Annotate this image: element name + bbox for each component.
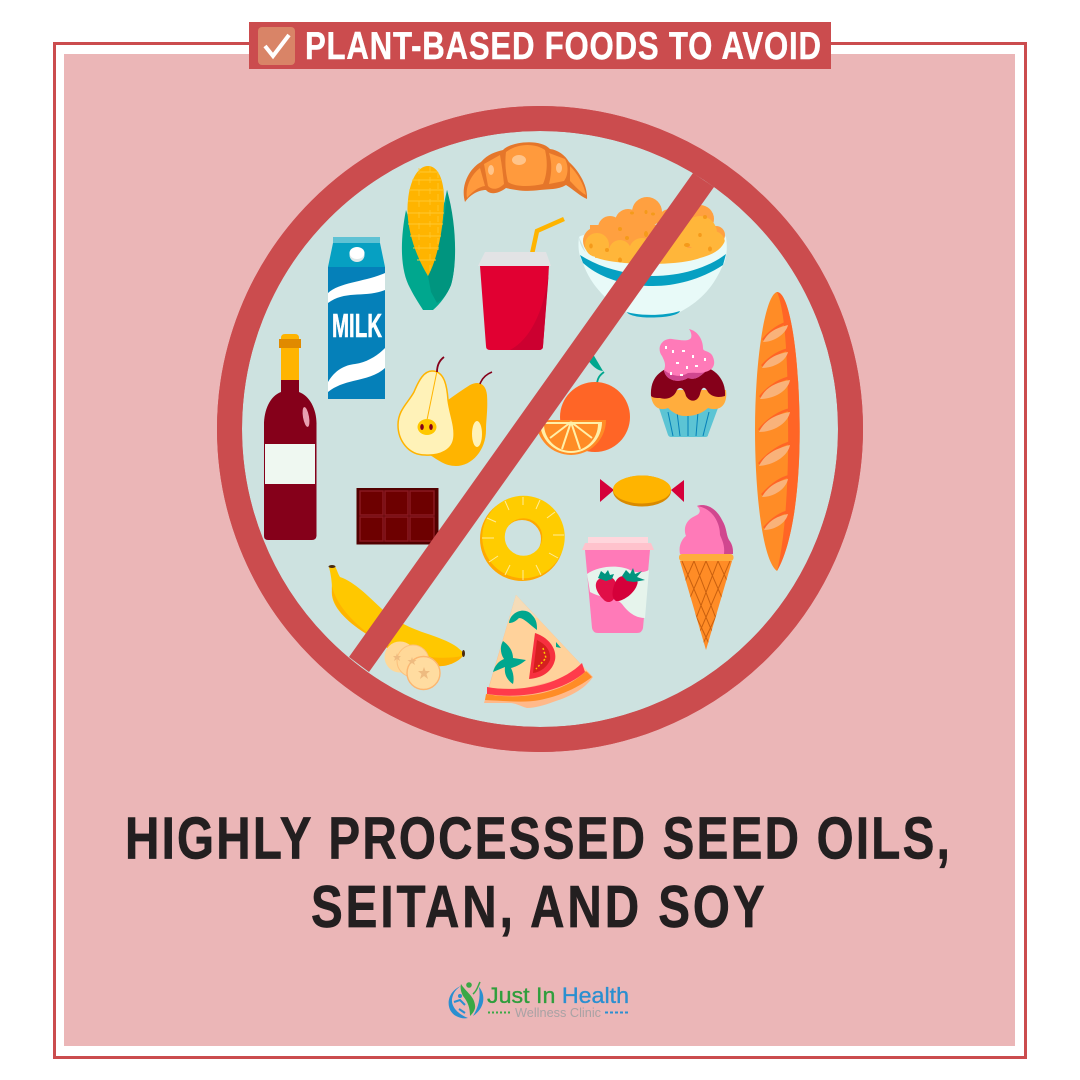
logo name: Just In Health (487, 983, 629, 1008)
food: ice cream cone (679, 505, 734, 650)
icon: check box (258, 27, 295, 65)
food: banana (328, 565, 465, 690)
food: red drink cup (478, 219, 564, 350)
main heading: HIGHLY PROCESSED SEED OILS, (125, 805, 950, 872)
logo emblem (449, 982, 483, 1018)
main heading: SEITAN, AND SOY (311, 874, 765, 940)
header banner (249, 22, 831, 69)
banner heading: PLANT-BASED FOODS TO AVOID (305, 25, 821, 68)
milk label: MILK (332, 307, 382, 344)
food: baguette (755, 292, 800, 571)
food: cupcake (651, 329, 726, 437)
food: orange (536, 349, 630, 455)
logo: Just In Health Wellness Clinic (449, 982, 629, 1020)
logo subtitle: Wellness Clinic (515, 1006, 601, 1020)
food: cereal bowl (578, 197, 727, 318)
food: pears (398, 357, 492, 466)
sign ring overlay (230, 118, 850, 740)
food: milk carton (328, 237, 385, 399)
food: candy (600, 476, 684, 506)
food: wine bottle (264, 334, 317, 540)
sign disc (230, 118, 850, 740)
food: strawberry yogurt cup (582, 537, 654, 633)
prohibition sign with foods (230, 118, 850, 740)
food: corn (402, 166, 455, 310)
food: chocolate bar (356, 488, 438, 544)
food: pineapple ring (482, 497, 564, 580)
slash bar (349, 173, 714, 672)
food: pizza slice (484, 595, 593, 708)
food: croissant (464, 142, 587, 202)
main heading (125, 805, 950, 940)
